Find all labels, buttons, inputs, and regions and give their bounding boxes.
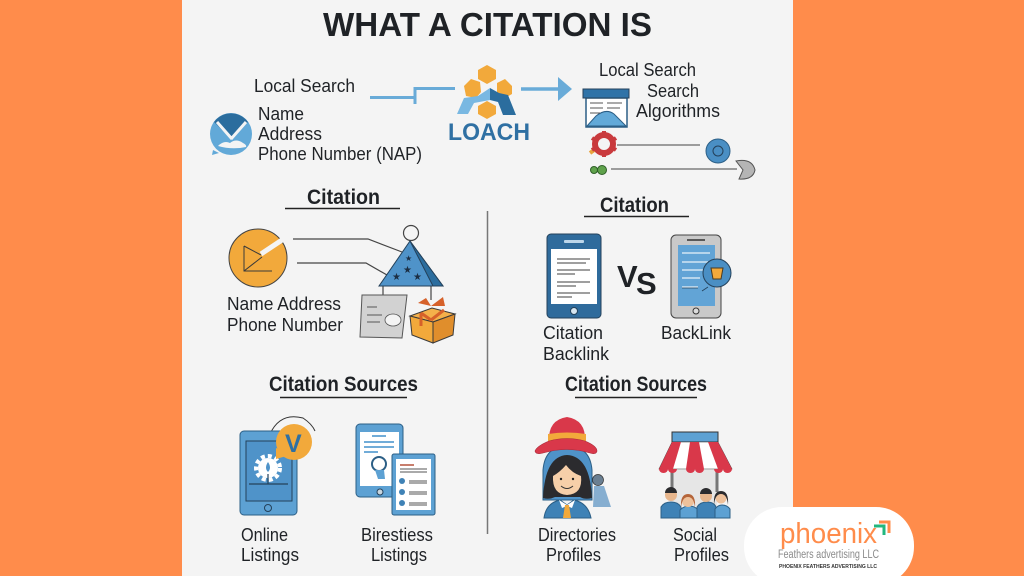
icon: green dots [590,166,606,174]
heading: citation left [285,186,400,209]
logo: phoenix feathers advertising [744,507,914,576]
text: name address phone number [227,294,343,335]
text: online listings [241,525,299,565]
heading: citation left: Citation [307,186,380,209]
icon: gray document [360,295,407,338]
text: NAP list [258,104,422,164]
text: local search algorithms labels: Local Search [599,60,696,80]
source: social profiles [659,432,732,565]
icon: blue star pennant: ★ [403,265,412,276]
text: VS: S [636,266,657,301]
text: birestiess listings: Birestiess [361,525,433,545]
source: online listings [240,417,315,565]
text: VS: V [617,259,638,294]
text: social profiles [673,525,729,565]
text: name address phone number: Name Address [227,294,341,314]
text: citation backlink: Citation [543,323,603,343]
icon: blue star pennant [379,226,443,286]
text: directories profiles: Directories [538,525,616,545]
panel: main infographic sheet [182,0,793,576]
icon: blue chat badge [210,113,252,155]
icon: citation phone [547,234,601,318]
illustration: NAP diagram [227,226,455,343]
section: local search NAP [210,76,455,164]
rule [617,144,700,146]
text: social profiles: Social [673,525,717,545]
icon: blue star pennant: ★ [392,272,401,283]
text: local search algorithms labels: Search [647,81,699,101]
icon: blue star pennant: ★ [405,254,412,263]
text: name address phone number: Phone Number [227,315,343,335]
logo: phoenix feathers advertising: phoenix [780,518,877,550]
text: birestiess listings [361,525,433,565]
text: local search label: Local Search [254,76,355,96]
heading: citation sources right: Citation Sources [565,373,707,396]
text: local search algorithms labels [599,60,720,121]
text: NAP list: Name [258,104,304,124]
icon: market stall with people [659,432,732,518]
text: backlink: BackLink [661,323,732,343]
logo: LOACH: LOACH [448,119,530,146]
icon: tablet with badge [240,417,315,515]
icon: blue star pennant: ★ [413,272,422,283]
icon: woman with red hat [535,417,611,518]
center divider [486,211,488,534]
connector lines [293,239,431,300]
text: social profiles: Profiles [674,545,729,565]
heading: citation right: Citation [600,194,669,217]
text: citation backlink [543,323,610,364]
title: WHAT A CITATION IS [323,6,652,43]
icon: red gear [590,131,616,157]
text: online listings: Listings [241,545,299,565]
text: directories profiles: Profiles [546,545,601,565]
text: local search algorithms labels: Algorithms [636,101,720,121]
text: VS [617,259,657,301]
text: NAP list: Address [258,124,322,144]
text: directories profiles [538,525,616,565]
text: NAP list: Phone Number (NAP) [258,144,422,164]
icon: tablet and document [356,424,435,515]
icon: browser window [583,89,629,127]
logo: LOACH [448,65,530,146]
rule [611,168,737,170]
icon: orange gift box [410,297,455,343]
icon: growth arrows [874,522,889,535]
text: citation backlink: Backlink [543,344,610,364]
heading: citation sources left: Citation Sources [269,373,418,396]
icon: gray shield [736,160,755,179]
arrow: logo to search algorithms [521,77,572,101]
logo: phoenix feathers advertising: Feathers advertising LLC [778,549,879,561]
connector line to logo [370,88,455,104]
illustration: citation vs backlink [543,234,732,364]
section: search algorithms [583,60,755,179]
text: online listings: Online [241,525,288,545]
icon: orange pie circle [229,229,287,287]
source: business listings [356,424,435,565]
text: birestiess listings: Listings [371,545,427,565]
logo: phoenix feathers advertising: PHOENIX FEATHERS ADVERTISING LLC [779,564,877,570]
icon: tablet with badge: V [285,430,302,458]
source: directories profiles [535,417,616,565]
icon: backlink phone [671,235,731,318]
icon: blue circle [706,139,730,163]
